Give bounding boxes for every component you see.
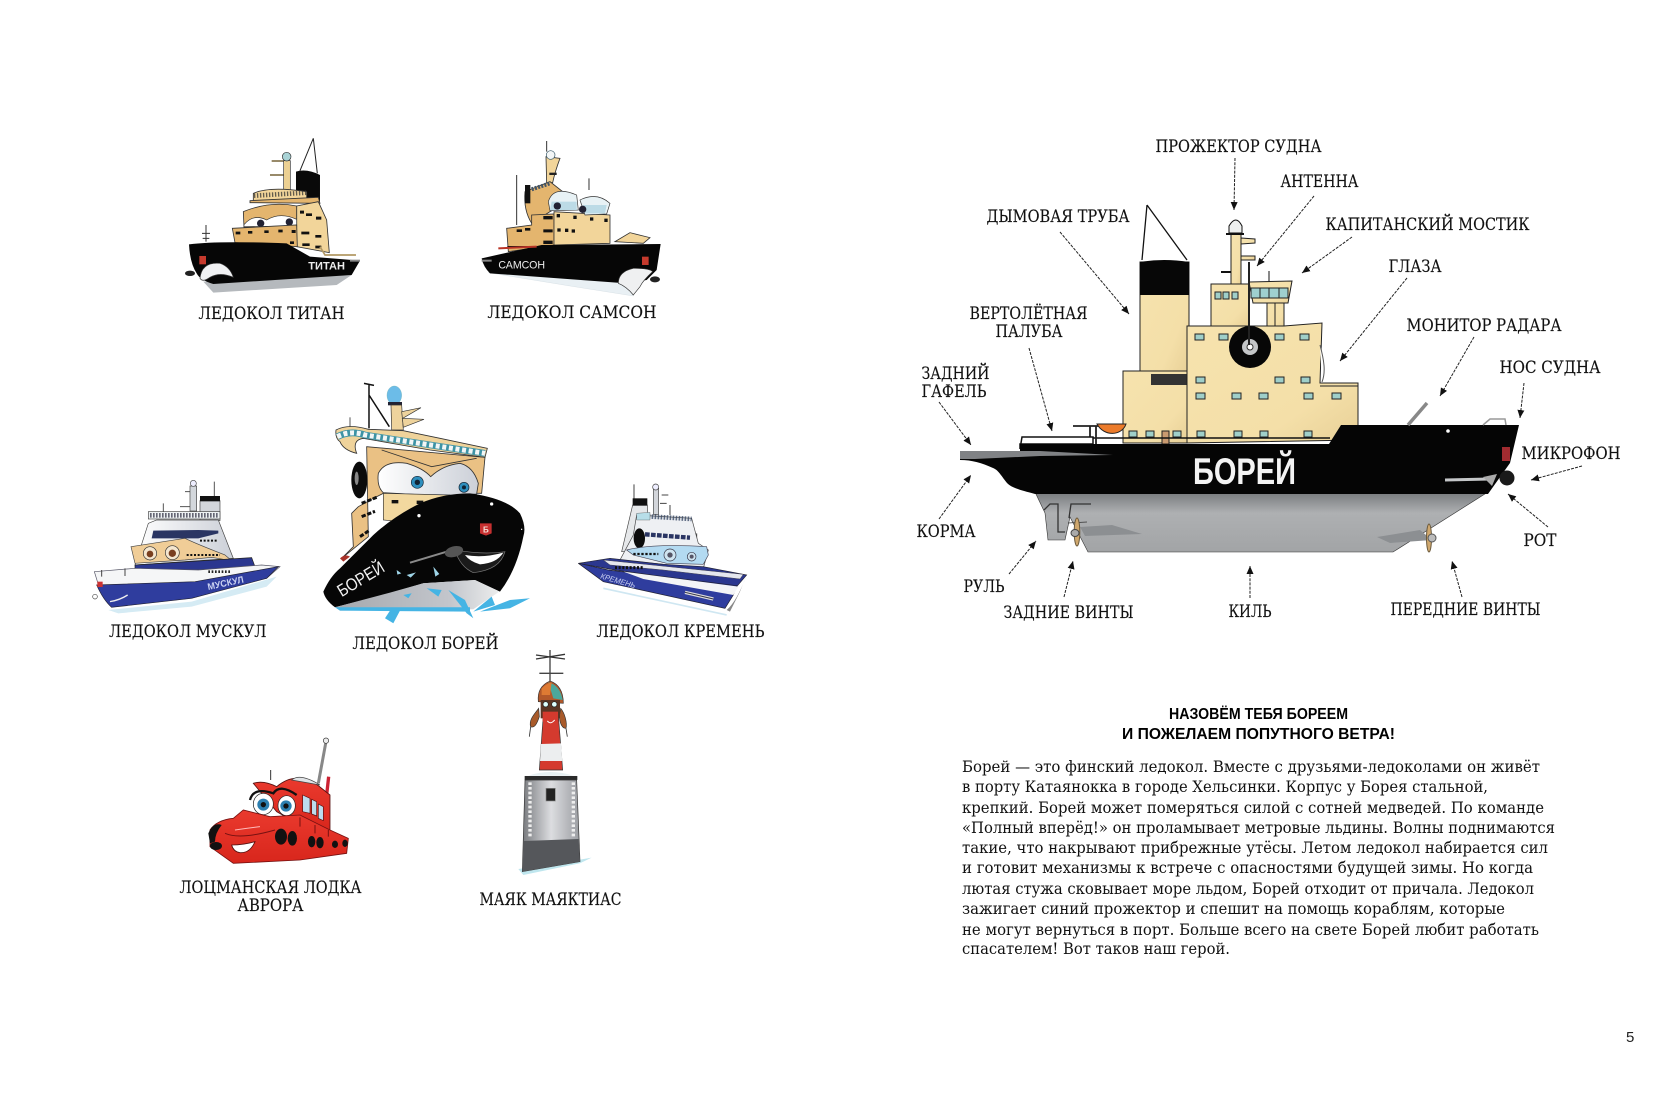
ship: icebreaker Muskul xyxy=(93,480,280,613)
text block: description: спасателем! Вот таков наш герой. xyxy=(962,940,1230,958)
callout: funnel: ДЫМОВАЯ ТРУБА xyxy=(986,207,1130,227)
ship name: БОРЕЙ xyxy=(1193,450,1296,492)
callout: gaff: ЗАДНИЙ xyxy=(922,363,990,384)
lighthouse: Mayaktias xyxy=(518,650,592,875)
callout: rudder: РУЛЬ xyxy=(964,577,1004,597)
callout: radar monitor: МОНИТОР РАДАРА xyxy=(1406,316,1562,336)
callout: stern xyxy=(916,475,976,542)
callout: rear propellers: ЗАДНИЕ ВИНТЫ xyxy=(1004,603,1134,623)
ship: icebreaker Samson: САМСОН xyxy=(498,259,545,271)
lifeboat and davit xyxy=(1073,424,1126,445)
text block: description: в порту Катаянокка в городе Хельсинки. Корпус у Борея стальной, xyxy=(962,778,1488,796)
callout: bridge xyxy=(1302,214,1530,273)
callout: gaff xyxy=(922,363,990,445)
callout: rudder xyxy=(964,541,1036,597)
callout: helicopter deck xyxy=(970,303,1088,431)
diagram: side view of Borey xyxy=(960,205,1519,552)
microphone red light xyxy=(1502,447,1510,461)
text block: description: Борей — это финский ледокол. Вместе с друзьями-ледоколами он живёт xyxy=(962,758,1540,776)
callout: eyes xyxy=(1340,257,1442,361)
label: Kremen: ЛЕДОКОЛ КРЕМЕНЬ xyxy=(596,622,764,642)
funnel xyxy=(1140,205,1189,372)
ship: icebreaker Borey xyxy=(323,383,530,623)
ship: icebreaker Muskul: МУСКУЛ xyxy=(207,575,245,592)
callout: antenna: АНТЕННА xyxy=(1280,172,1359,192)
callout: front propellers xyxy=(1390,561,1540,620)
callout: bow: НОС СУДНА xyxy=(1500,358,1601,378)
ship: icebreaker Titan: ТИТАН xyxy=(308,260,345,272)
text block: description: не могут вернуться в порт. Больше всего на свете Борей любит работать xyxy=(962,921,1539,939)
label: Aurora: ЛОЦМАНСКАЯ ЛОДКА xyxy=(180,878,362,898)
text block: description: крепкий. Борей может померяться силой с сотней медведей. По команде xyxy=(962,799,1544,817)
callout: searchlight: ПРОЖЕКТОР СУДНА xyxy=(1156,137,1322,157)
black hull xyxy=(960,425,1519,494)
white hull dot xyxy=(1446,429,1450,433)
ship: icebreaker Kremen: КРЕМЕНЬ xyxy=(599,572,637,590)
front propeller xyxy=(1377,524,1436,552)
text block: description: зажигает синий прожектор и спешит на помощь кораблям, которые xyxy=(962,900,1505,918)
ship: icebreaker Samson xyxy=(482,141,661,296)
ship: icebreaker Borey: Б xyxy=(483,525,489,534)
mast and searchlight xyxy=(1221,220,1255,285)
callout: rear propellers xyxy=(1004,561,1134,623)
keel and underwater hull xyxy=(1035,492,1488,552)
callout: bow xyxy=(1500,358,1601,418)
bow rail xyxy=(1483,419,1506,425)
heading: И ПОЖЕЛАЕМ ПОПУТНОГО ВЕТРА! xyxy=(1122,726,1395,743)
callout: eyes: ГЛАЗА xyxy=(1388,257,1442,277)
rear propeller xyxy=(1068,518,1142,546)
callout: front propellers: ПЕРЕДНИЕ ВИНТЫ xyxy=(1390,600,1540,620)
ship: icebreaker Kremen xyxy=(578,484,747,615)
callout: antenna xyxy=(1257,172,1359,266)
label: Aurora: АВРОРА xyxy=(238,896,304,916)
callout: keel xyxy=(1228,566,1272,622)
radar monitor xyxy=(1408,403,1427,425)
callout: radar monitor xyxy=(1406,316,1562,396)
text block: description: лютая стужа сковывает море льдом, Борей отходит от причала. Ледокол xyxy=(962,880,1534,898)
callout: bridge: КАПИТАНСКИЙ МОСТИК xyxy=(1326,214,1530,235)
callout: microphone xyxy=(1522,444,1620,480)
captain's bridge xyxy=(1249,271,1292,327)
text block: description: и готовит механизмы к встрече с опасностями будущей зимы. Но когда xyxy=(962,859,1533,877)
callout: mouth xyxy=(1508,494,1557,551)
label: Titan: ЛЕДОКОЛ ТИТАН xyxy=(198,304,344,324)
ship: icebreaker Borey: БОРЕЙ xyxy=(333,557,388,601)
callout: stern: КОРМА xyxy=(916,522,976,542)
helicopter deck xyxy=(1020,437,1093,449)
text block: description xyxy=(962,758,1555,958)
ship: icebreaker Titan xyxy=(185,138,360,293)
label: Samson: ЛЕДОКОЛ САМСОН xyxy=(488,303,656,323)
heading xyxy=(1122,705,1395,743)
heading: НАЗОВЁМ ТЕБЯ БОРЕЕМ xyxy=(1169,705,1348,723)
antenna and life ring xyxy=(1229,262,1271,368)
callout: keel: КИЛЬ xyxy=(1228,602,1272,622)
callout: funnel xyxy=(986,207,1130,314)
callout: helicopter deck: ПАЛУБА xyxy=(996,322,1063,342)
text block: description: «Полный вперёд!» он проламывает метровые льдины. Волны поднимаются xyxy=(962,819,1555,837)
anchor mouth xyxy=(1445,470,1514,486)
label: Muskul: ЛЕДОКОЛ МУСКУЛ xyxy=(109,622,266,642)
label: Mayaktias: МАЯК МАЯКТИАС xyxy=(480,890,622,910)
boat: pilot boat Aurora xyxy=(208,738,348,863)
rudder xyxy=(1044,504,1091,532)
callout: helicopter deck: ВЕРТОЛЁТНАЯ xyxy=(970,303,1088,324)
page number: 5 xyxy=(1626,1029,1634,1046)
callout: gaff: ГАФЕЛЬ xyxy=(922,382,986,402)
upper house xyxy=(1211,284,1249,326)
label: Borey: ЛЕДОКОЛ БОРЕЙ xyxy=(352,633,498,654)
callout: mouth: РОТ xyxy=(1524,531,1557,551)
main superstructure xyxy=(1093,323,1358,444)
text block: description: такие, что накрывают прибрежные утёсы. Летом ледокол набирается сил xyxy=(962,839,1548,857)
callout: microphone: МИКРОФОН xyxy=(1522,444,1620,464)
label: Aurora xyxy=(180,878,362,916)
aft block xyxy=(1123,371,1187,443)
